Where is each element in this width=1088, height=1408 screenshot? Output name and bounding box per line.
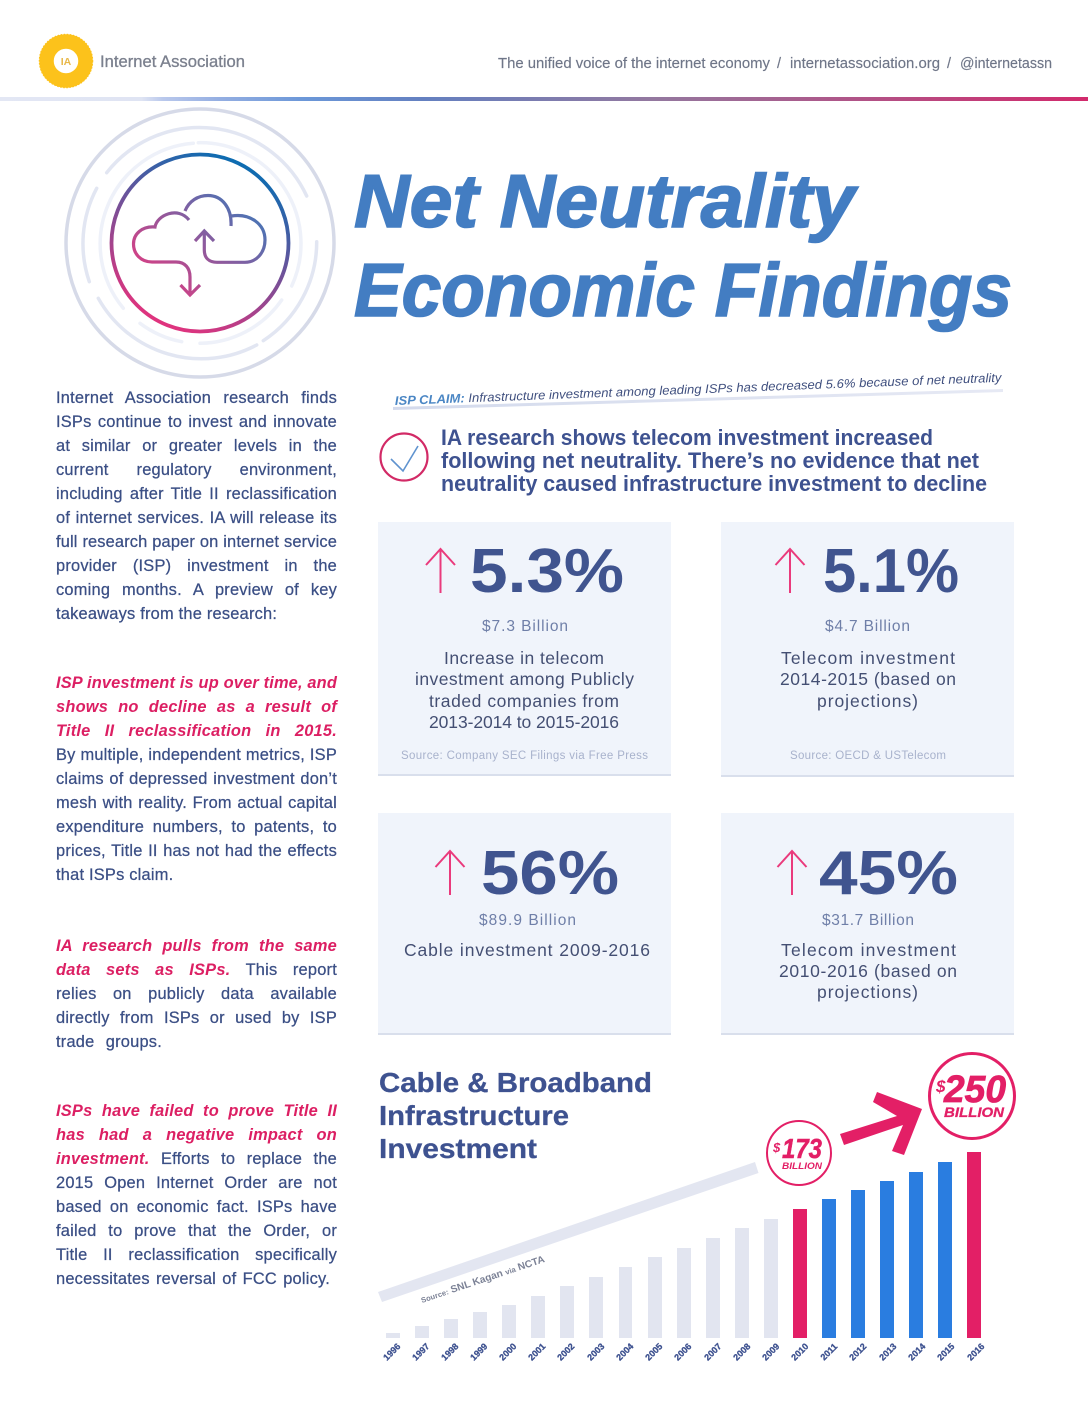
text block: ISP investment is up: shows no decline as a result of — [56, 698, 337, 716]
callout: $173 billion: 173 — [782, 1133, 822, 1164]
research headline: following net neutrality. There’s no evidence that net — [441, 448, 979, 473]
text block: failed to prove: Title II reclassification specifically — [56, 1246, 337, 1264]
year labels: 1999 — [468, 1341, 489, 1362]
chart heading: Cable & Broadband — [379, 1067, 652, 1098]
text block: ISP investment is up: Title II reclassification in 2015. — [56, 722, 337, 740]
hero icon: cloud in concentric rings — [66, 109, 334, 377]
panel: stat 5.1% — [721, 522, 1014, 777]
arrow: growth — [840, 1092, 922, 1155]
chart source: Source: SNL Kagan via NCTA — [419, 1254, 546, 1306]
logo: Internet Association: IA — [61, 56, 72, 68]
text block: failed to prove: failed to prove that the Order, or — [56, 1222, 337, 1240]
year labels: 2004 — [614, 1341, 635, 1362]
text block: same data sets: data sets as ISPs. This report — [56, 960, 337, 978]
icon: up arrow — [778, 851, 806, 895]
year labels: 2011 — [818, 1341, 839, 1362]
year labels: 2006 — [672, 1341, 693, 1362]
callout: $250 billion: 250 — [943, 1069, 1006, 1111]
panel: stat 56%: Cable investment 2009-2016 — [404, 940, 650, 960]
title: Economic Findings — [354, 248, 1012, 332]
tagline — [498, 56, 1052, 72]
icon: up arrow — [776, 549, 804, 593]
logo: Internet Association — [40, 35, 245, 87]
text block: intro: takeaways from the research: — [56, 604, 277, 622]
panel: stat 45% — [721, 813, 1014, 1035]
text block: failed to prove: investment. Efforts to replace the — [56, 1150, 337, 1168]
panel: stat 45%: projections) — [817, 982, 918, 1002]
callout: $250 billion: $ — [935, 1077, 946, 1096]
year labels: 1998 — [439, 1341, 460, 1362]
bar chart: investment by year — [378, 1152, 986, 1362]
panel: stat 5.1%: 2014-2015 (based on — [780, 669, 956, 689]
year labels: 1997 — [410, 1341, 431, 1362]
panel: stat 45%: $31.7 Billion — [822, 912, 914, 929]
research headline — [441, 425, 987, 496]
panel: stat 56% — [378, 813, 671, 1035]
text block: intro: coming months. A preview of key — [56, 580, 337, 598]
text block: same data sets: directly from ISPs or used by ISP — [56, 1008, 337, 1026]
text block: failed to prove: ISPs have failed to prove Title II — [56, 1102, 337, 1120]
panel: stat 5.3%: traded companies from — [429, 691, 619, 711]
tagline: The unified voice of the internet economy — [498, 56, 771, 72]
text block: ISP investment is up: mesh with reality. From actual capital — [56, 794, 337, 812]
callout: $173 billion: BILLION — [782, 1161, 823, 1171]
title: Net Neutrality — [354, 159, 858, 243]
year labels: 2007 — [702, 1341, 723, 1362]
chart heading: Infrastructure — [379, 1100, 569, 1131]
tagline: / — [947, 56, 952, 72]
year labels: 2015 — [935, 1341, 956, 1362]
year labels: 2001 — [526, 1341, 547, 1362]
panel: stat 5.3%: 2013-2014 to 2015-2016 — [429, 712, 619, 732]
year labels: 2009 — [760, 1341, 781, 1362]
text block: failed to prove: has had a negative impact on — [56, 1126, 337, 1144]
tagline: internetassociation.org — [790, 56, 940, 72]
text block: intro: at similar or greater levels in the — [56, 436, 337, 454]
text block: intro: ISPs continue to invest and innovate — [56, 412, 337, 430]
text block: ISP investment is up: that ISPs claim. — [56, 866, 173, 884]
panel: stat 45%: 45% — [819, 839, 958, 908]
icon: up arrow — [436, 851, 464, 895]
year labels: 2016 — [965, 1341, 986, 1362]
ISP claim banner: ISP CLAIM: Infrastructure investment among leading ISPs has decreased 5.6% because of net neutrality — [395, 371, 1002, 408]
text block: intro: Internet Association research finds — [56, 388, 337, 406]
header gradient bar — [0, 97, 1088, 101]
panel: stat 5.1%: Telecom investment — [781, 648, 955, 668]
text block: ISP investment is up: ISP investment is up over time, and — [56, 674, 337, 692]
logo: Internet Association: Internet Association — [100, 53, 245, 71]
callout: $250 billion — [930, 1054, 1014, 1138]
chart heading — [379, 1067, 652, 1164]
icon: up arrow — [426, 549, 455, 593]
text block: failed to prove: necessitates reversal of FCC policy. — [56, 1270, 330, 1288]
year labels: 1996 — [381, 1341, 402, 1362]
panel: stat 5.3%: Increase in telecom — [444, 648, 604, 668]
year labels: 2012 — [847, 1341, 868, 1362]
panel: stat 56%: $89.9 Billion — [479, 912, 576, 929]
panel: stat 5.3%: $7.3 Billion — [482, 618, 568, 635]
research headline: IA research shows telecom investment increased — [441, 425, 933, 450]
text block: ISP investment is up: expenditure numbers, to patents, to — [56, 818, 337, 836]
year labels: 2013 — [877, 1341, 898, 1362]
text block: failed to prove: based on economic fact. ISPs have — [56, 1198, 337, 1216]
year labels: 2005 — [643, 1341, 664, 1362]
panel: stat 5.3%: Source: Company SEC Filings via Free Press — [401, 750, 648, 762]
panel: stat 5.3% — [378, 522, 671, 776]
text block: intro: of internet services. IA will release its — [56, 508, 337, 526]
panel: stat 5.3%: investment among Publicly — [415, 669, 634, 689]
title — [354, 159, 1012, 332]
panel: stat 56%: 56% — [481, 839, 619, 908]
text block: same data sets: IA research pulls from the same — [56, 936, 337, 954]
tagline: / — [777, 56, 782, 72]
text block: ISP investment is up: claims of depressed investment don’t — [56, 770, 337, 788]
year labels — [381, 1341, 986, 1362]
text block: same data sets: relies on publicly data available — [56, 984, 337, 1002]
year labels: 2000 — [497, 1341, 518, 1362]
text block: intro — [56, 388, 337, 623]
icon: check in circle — [380, 434, 428, 480]
text block: ISP investment is up: By multiple, independent metrics, ISP — [56, 746, 337, 764]
year labels: 2008 — [731, 1341, 752, 1362]
year labels: 2002 — [555, 1341, 576, 1362]
text block: ISP investment is up — [56, 674, 338, 884]
panel: stat 5.3%: 5.3% — [470, 537, 624, 606]
text block: failed to prove — [56, 1102, 338, 1288]
panel: stat 45%: 2010-2016 (based on — [779, 961, 957, 981]
text block: failed to prove: 2015 Open Internet Order are not — [56, 1174, 337, 1192]
text block: ISP investment is up: prices, Title II has not had the effects — [56, 842, 337, 860]
research headline: neutrality caused infrastructure investment to decline — [441, 471, 987, 496]
panel: stat 5.1%: projections) — [817, 691, 918, 711]
text block: intro: including after Title II reclassification — [56, 484, 337, 502]
text block: intro: provider (ISP) investment in the — [56, 556, 337, 574]
text block: same data sets — [56, 936, 337, 1051]
chart heading: Investment — [379, 1133, 537, 1164]
year labels: 2010 — [789, 1341, 810, 1362]
callout: $173 billion — [767, 1121, 831, 1185]
text block: intro: full research paper on internet service — [56, 532, 337, 550]
callout: $250 billion: BILLION — [944, 1104, 1005, 1120]
panel: stat 5.1%: Source: OECD & USTelecom — [790, 750, 946, 762]
panel: stat 45%: Telecom investment — [781, 940, 956, 960]
trend band — [378, 1162, 758, 1302]
panel: stat 5.1%: 5.1% — [823, 537, 959, 606]
text block: intro: current regulatory environment, — [56, 460, 337, 478]
year labels: 2014 — [906, 1341, 927, 1362]
tagline: @internetassn — [960, 56, 1052, 72]
callout: $173 billion: $ — [772, 1140, 781, 1155]
panel: stat 5.1%: $4.7 Billion — [825, 618, 910, 635]
year labels: 2003 — [585, 1341, 606, 1362]
text block: same data sets: trade groups. — [56, 1032, 162, 1050]
